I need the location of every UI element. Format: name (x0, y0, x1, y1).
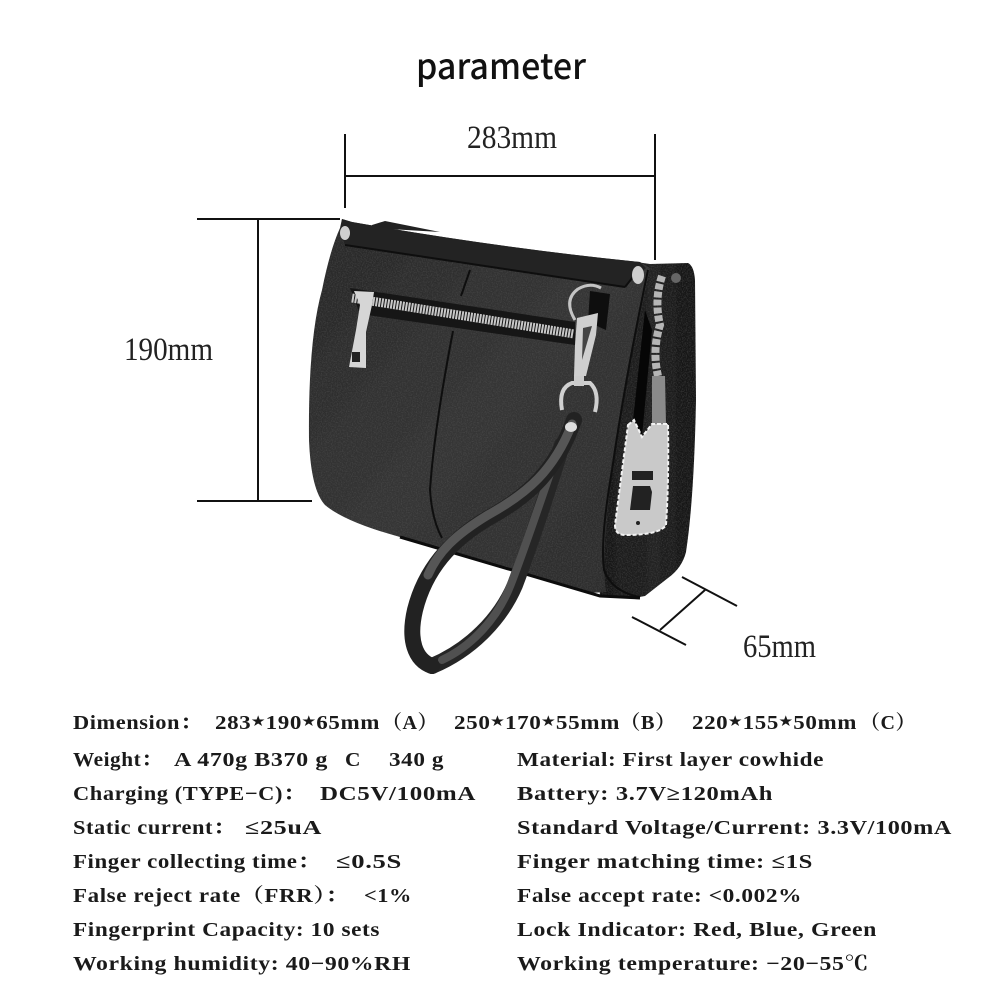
snap rivets (340, 226, 681, 284)
strap loop tab (588, 291, 610, 330)
dimension: height 190mm: 190mm (124, 332, 213, 368)
spec: weight: Weight： (73, 749, 163, 771)
spec: static current: Static current： (73, 817, 236, 839)
side gap (632, 310, 652, 436)
specifications table (73, 712, 952, 975)
clasp ring (570, 285, 601, 320)
spec: weight (73, 749, 444, 771)
top flap (340, 219, 646, 287)
bag side panel (596, 262, 696, 598)
bag front panel (309, 219, 650, 593)
spec: standard voltage: Standard Voltage/Current: 3.3V/100mA (517, 817, 952, 839)
spec: charging (73, 783, 476, 805)
title: parameter (416, 39, 587, 90)
spec: dimension: 155 (743, 712, 779, 734)
fingerprint lock plate (615, 420, 668, 535)
spec: material: Material: First layer cowhide (517, 749, 824, 771)
spec: dimension: ★ (779, 714, 793, 728)
spec: dimension: （C） (860, 712, 916, 734)
fingerprint sensor (630, 486, 652, 510)
spec: dimension: 55mm (556, 712, 620, 734)
spec: dimension: 190 (266, 712, 302, 734)
strap rivet (565, 422, 577, 432)
spec: working temperature: Working temperature: −20−55℃ (517, 953, 869, 975)
dimension: width 283mm (345, 120, 655, 260)
spec: lock indicator: Lock Indicator: Red, Blue, Green (517, 919, 877, 941)
zipper teeth (352, 298, 574, 334)
spec: dimension: （B） (620, 712, 676, 734)
back flap edge (372, 221, 440, 232)
spec: finger matching time: Finger matching time: ≤1S (517, 851, 813, 873)
spec: false reject rate: <1% (364, 885, 412, 907)
bottom edge (400, 537, 640, 598)
spec: finger collecting time (73, 851, 402, 873)
spec: dimension: （A） (382, 712, 438, 734)
spec: finger collecting time: ≤0.5S (336, 851, 402, 873)
spec: false reject rate: False reject rate（FRR）： (73, 885, 349, 907)
spec: weight: A 470g B370 g (174, 749, 328, 771)
spec: dimension: ★ (728, 714, 743, 728)
product photo: black leather clutch (309, 219, 696, 666)
spec: weight: 340 g (389, 749, 444, 771)
spec: dimension: Dimension： (73, 712, 203, 734)
spec: dimension: ★ (541, 714, 556, 728)
seams (345, 245, 648, 597)
spec: charging: DC5V/100mA (320, 783, 476, 805)
chain (655, 276, 662, 376)
lock window (632, 471, 653, 480)
clasp hook (574, 313, 598, 376)
dimension: depth 65mm: 65mm (743, 629, 816, 665)
lock tongue (652, 376, 666, 424)
dimension: depth 65mm (632, 577, 816, 665)
spec: dimension: 250 (454, 712, 486, 734)
spec: dimension: 170 (505, 712, 541, 734)
spec: charging: Charging (TYPE−C)： (73, 783, 306, 805)
spec: weight: C (345, 749, 361, 771)
dimension: height 190mm (124, 219, 340, 501)
dimension: width 283mm: 283mm (467, 120, 557, 156)
spec: finger collecting time: Finger collecting time： (73, 851, 321, 873)
spec: battery: Battery: 3.7V≥120mAh (517, 783, 773, 805)
spec: dimension: 50mm (793, 712, 857, 734)
spec: dimension: 65mm (316, 712, 380, 734)
spec: dimension (73, 712, 916, 734)
spec: fingerprint capacity: Fingerprint Capacity: 10 sets (73, 919, 380, 941)
spec: dimension: ★ (302, 714, 316, 728)
spec: dimension: ★ (251, 714, 266, 728)
wrist strap (412, 420, 574, 666)
spec: static current: ≤25uA (245, 817, 322, 839)
spec: working humidity: Working humidity: 40−90%RH (73, 953, 411, 975)
D ring (561, 383, 597, 412)
zipper opening (350, 288, 575, 345)
spec: dimension: ★ (490, 714, 505, 728)
spec: static current (73, 817, 322, 839)
zipper pull (349, 291, 374, 368)
spec: false accept rate: False accept rate: <0.002% (517, 885, 802, 907)
spec: dimension: 220 (692, 712, 724, 734)
spec: dimension: 283 (215, 712, 246, 734)
